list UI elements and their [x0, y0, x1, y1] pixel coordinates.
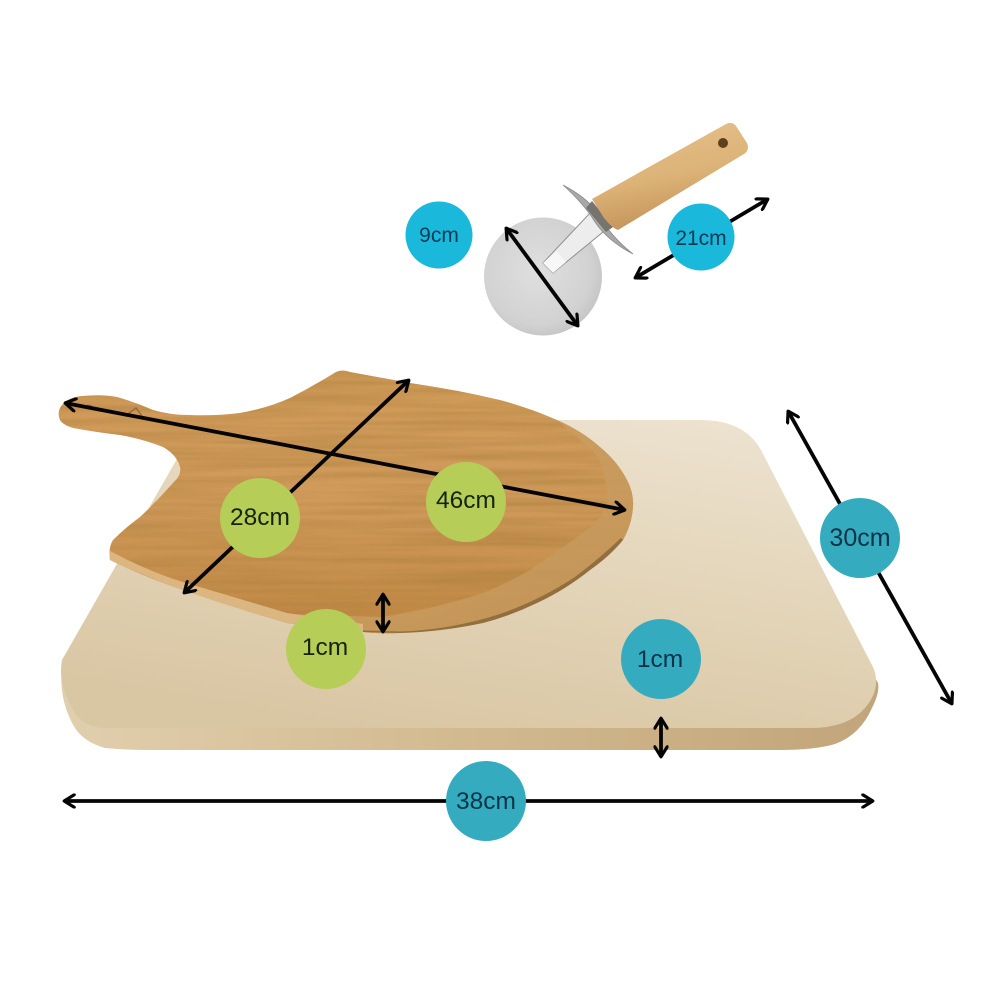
cutter guard — [563, 185, 633, 254]
arrow: peel thickness — [381, 594, 385, 632]
peel front edge — [108, 551, 363, 636]
label: peel 1cm: 1cm — [302, 634, 348, 661]
cutter ferrule — [586, 201, 613, 232]
arrow: peel width — [184, 380, 409, 593]
label: 21cm — [668, 204, 734, 270]
label: 30cm — [820, 498, 900, 578]
label: 28cm — [220, 478, 300, 558]
peel bottom shadow — [363, 538, 623, 633]
arrow: cutter diameter — [506, 228, 578, 326]
cutter hub — [543, 251, 566, 273]
cutter handle hole — [718, 138, 728, 148]
label: 38cm — [446, 761, 526, 841]
stone top surface — [61, 420, 876, 728]
peel wood grain — [59, 370, 634, 634]
label: peel 1cm — [286, 609, 366, 689]
peel rim — [287, 420, 633, 636]
label: 46cm: 46cm — [436, 487, 496, 514]
label: 30cm: 30cm — [829, 524, 891, 552]
arrow: stone width — [788, 411, 952, 704]
arrow: stone length — [64, 799, 873, 803]
pizza stone — [61, 420, 878, 750]
label: 21cm: 21cm — [675, 227, 727, 250]
label: 28cm: 28cm — [230, 504, 290, 531]
arrow: stone thickness — [659, 718, 663, 757]
peel handle logo mark — [87, 405, 142, 416]
arrow: peel length — [65, 403, 625, 510]
cutter arm — [543, 213, 603, 273]
label: 9cm — [406, 202, 472, 268]
stone side edge — [61, 650, 878, 750]
peel body — [59, 370, 633, 633]
cutter wheel — [484, 218, 602, 336]
label: 38cm: 38cm — [456, 788, 516, 815]
infographic: product dimensions — [58, 122, 954, 841]
label: 9cm: 9cm — [419, 224, 459, 247]
label: 46cm — [426, 462, 506, 542]
arrow: cutter length — [635, 199, 768, 278]
cutter wooden handle — [592, 123, 748, 230]
pizza cutter — [484, 123, 748, 336]
label: stone 1cm: 1cm — [637, 646, 683, 673]
pizza peel — [50, 360, 650, 640]
label: stone 1cm — [621, 619, 701, 699]
